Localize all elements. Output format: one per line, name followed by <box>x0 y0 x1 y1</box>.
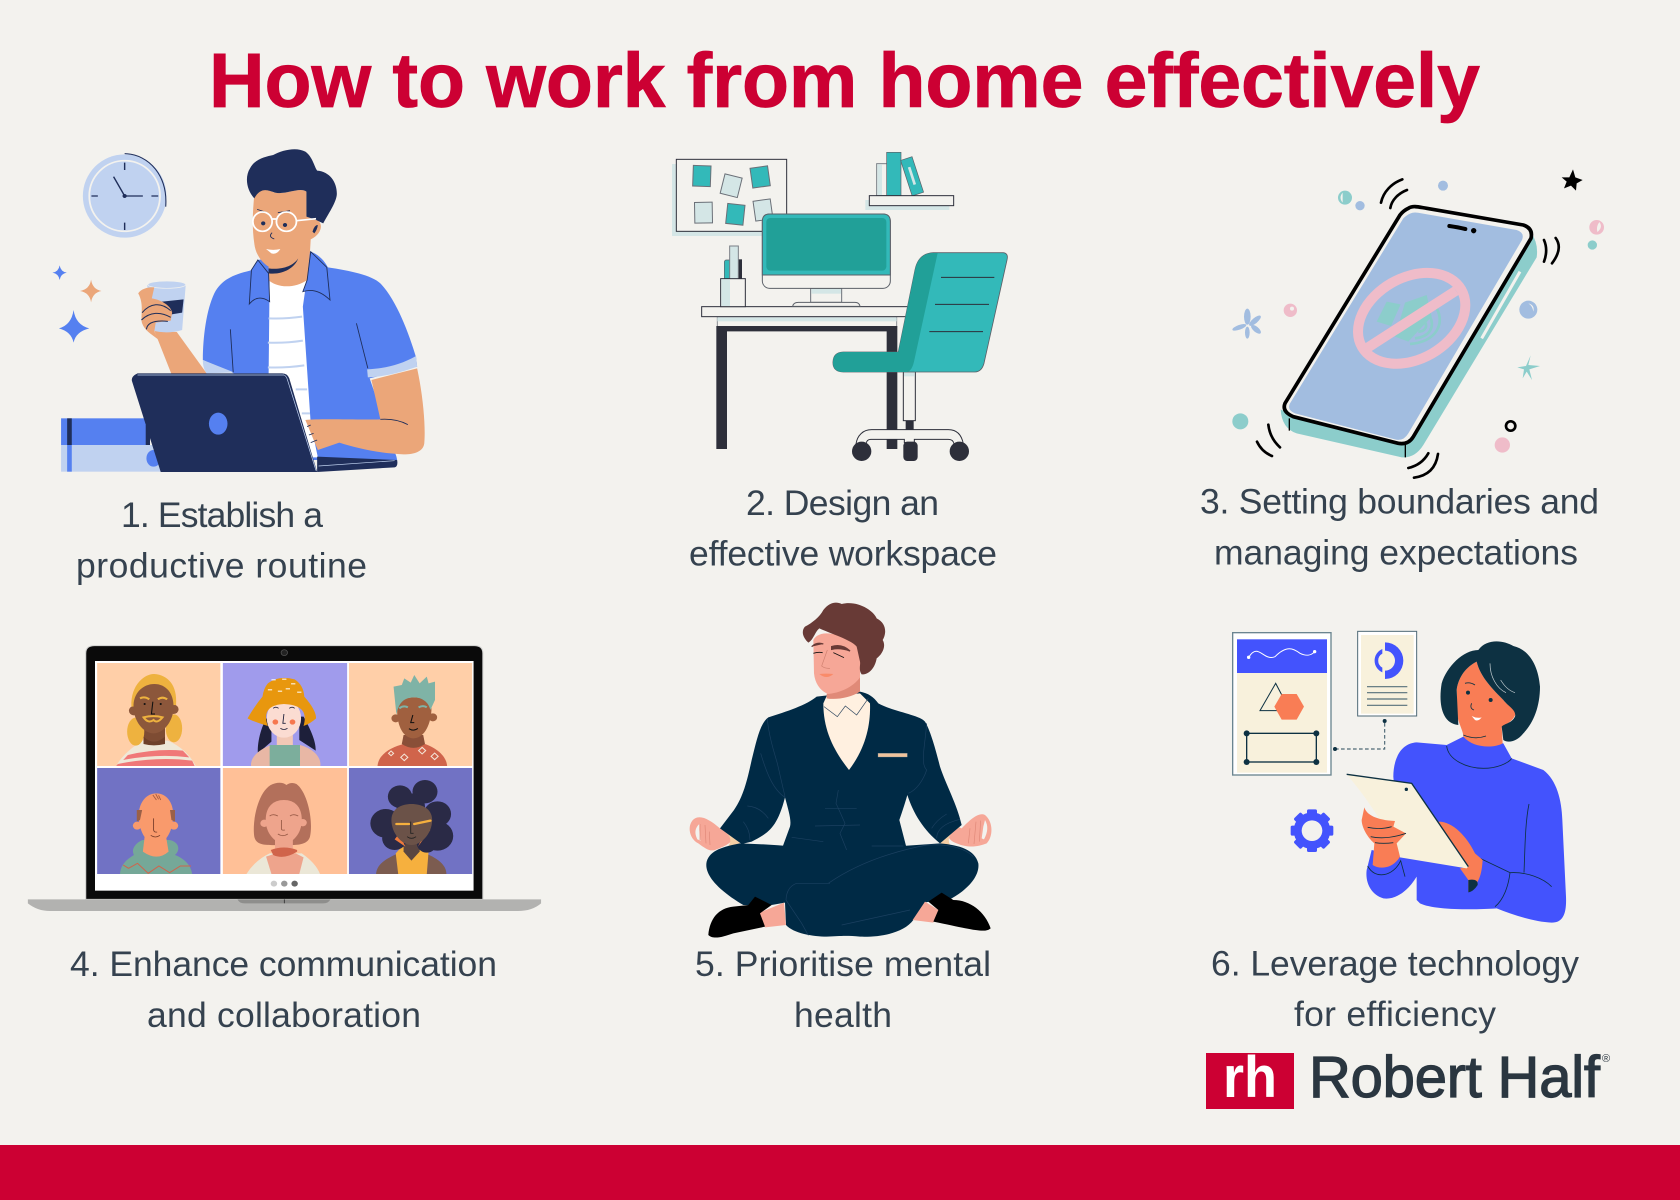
caption 6 <box>1211 944 1579 1034</box>
logo: Robert Half: rh <box>1223 1045 1277 1110</box>
caption 1: 1. Establish a <box>121 495 323 535</box>
laptop body <box>28 646 541 911</box>
logo: Robert Half: Robert Half <box>1309 1045 1601 1110</box>
caption 4: and collaboration <box>147 995 421 1035</box>
document with chart <box>1358 631 1417 716</box>
woman with tablet <box>1347 641 1566 923</box>
caption 6: for efficiency <box>1294 994 1496 1034</box>
video tile: man with green hair <box>349 663 472 766</box>
panel: 4 video call laptop illustration <box>28 646 541 911</box>
video tile: woman with brown bob <box>223 768 347 874</box>
panel: 2 workspace illustration <box>672 152 1007 461</box>
caption 3: 3. Setting boundaries and <box>1200 482 1599 522</box>
icon: muted speaker <box>1342 254 1482 382</box>
video tile: woman with curly hair <box>349 768 472 874</box>
caption 2 <box>689 483 997 574</box>
vibration marks <box>1257 179 1559 478</box>
video tile: woman in hat <box>223 663 347 766</box>
panel: 6 technology illustration <box>1233 631 1566 923</box>
pen holder <box>721 246 745 307</box>
desk <box>702 307 915 449</box>
hands <box>690 814 991 850</box>
caption 2: effective workspace <box>689 534 997 574</box>
document with shapes <box>1233 633 1331 775</box>
icon: wall clock <box>83 154 166 238</box>
caption 6: 6. Leverage technology <box>1211 944 1579 984</box>
caption 5: health <box>794 995 892 1035</box>
footer bar <box>0 1145 1680 1200</box>
dashed connector <box>1333 719 1387 751</box>
caption 3 <box>1200 482 1599 572</box>
video tile: bald man <box>97 768 220 874</box>
feet <box>708 893 991 938</box>
head <box>803 603 885 699</box>
caption 3: managing expectations <box>1214 532 1578 572</box>
logo: Robert Half: ® <box>1602 1053 1610 1065</box>
caption 5 <box>695 944 991 1035</box>
laptop <box>132 373 397 472</box>
pinboard <box>672 159 787 236</box>
suit <box>706 692 978 937</box>
phone <box>1281 207 1537 457</box>
shelf with books <box>865 152 954 210</box>
man with coffee <box>138 149 425 460</box>
caption 4: 4. Enhance communication <box>70 944 497 984</box>
office chair <box>833 253 1007 461</box>
panel: 3 vibrating phone illustration <box>1232 169 1604 478</box>
panel: 5 meditating man illustration <box>690 603 991 938</box>
caption 5: 5. Prioritise mental <box>695 944 991 984</box>
caption 1: productive routine <box>76 546 367 586</box>
monitor <box>762 214 890 306</box>
panel: 1 productive routine illustration <box>52 149 425 472</box>
video tile: man with moustache <box>97 663 220 766</box>
shirt <box>823 693 870 770</box>
icon: gear <box>1291 809 1333 852</box>
caption 1 <box>76 495 367 586</box>
caption 2: 2. Design an <box>746 483 939 523</box>
title: How to work from home effectively <box>209 38 1480 124</box>
icon: sparkles <box>52 265 101 343</box>
caption 4 <box>70 944 497 1035</box>
books <box>61 418 161 472</box>
decorative dots and stars <box>1232 169 1604 453</box>
